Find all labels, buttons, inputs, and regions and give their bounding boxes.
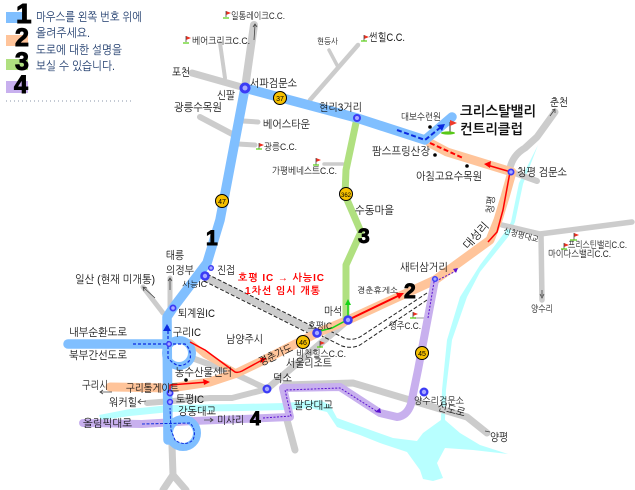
place labels: 청평 검문소 [517,166,568,179]
badge 47 [216,194,228,208]
route 4: purple road [83,280,435,424]
panel: legend [6,0,142,101]
place labels: 마이다스밸리C.C. [548,249,611,260]
destination dots [184,125,469,382]
place labels: 농수산물센터 [175,366,232,379]
badge 45 [416,346,428,360]
badge 45: 45 [418,351,426,358]
legend instructions: 도로에 대한 설명을 [36,43,122,57]
place labels: 워커힐 [109,396,137,409]
place labels: 팜스프링산장 [372,145,431,158]
route 4 dotted arrows [263,268,458,418]
badge 47: 47 [218,199,226,206]
big route numbers: 1 [206,227,218,250]
place labels: 현등사 [317,37,338,46]
badge 362: 362 [341,193,352,199]
place labels: 춘천 [550,96,568,109]
place labels: 새터삼거리 [400,261,448,274]
place labels: 토평IC [176,393,204,406]
big route numbers [206,225,416,430]
route 1: blue road [68,88,452,447]
place labels: 강동대교 [178,405,217,418]
badge 46: 46 [299,340,307,347]
place labels: 베어크리크C.C. [192,36,250,47]
closure notice [238,272,324,297]
place labels: 북부간선도로 [69,349,128,362]
place labels: 내부순환도로 [69,326,128,339]
place labels: 구리톨게이트 [126,382,180,395]
route 3 green arrows [320,299,351,331]
place labels: 신청평대교 [502,226,540,244]
icon: golf course flag [441,120,457,135]
legend instructions: 마우스를 왼쪽 번호 위에 [36,10,142,24]
route 3: green road [345,118,361,320]
place labels: 퇴계원IC [178,307,215,320]
place labels: 아침고요수목원 [416,170,482,183]
legend instructions: 올려주세요. [36,26,90,40]
legend instructions [36,10,142,73]
place labels: 썬힐C.C. [369,31,405,44]
badge 362 [340,188,352,200]
place labels: 포천 [172,66,190,79]
place labels: 광릉C.C. [264,142,297,153]
place labels: 베어스타운 [263,118,311,131]
legend swatch 4: 4 [14,71,28,99]
place labels: 경춘가도 [257,341,295,369]
interchange nodes [166,82,514,405]
badge 37: 37 [276,96,284,103]
place labels: 미사리 [217,414,244,427]
place labels: 서울리조트 [286,357,333,370]
route 1 direction dashes [133,124,445,444]
title: destination name: 컨트리클럽 [460,121,523,137]
legend swatch 3: 3 [15,48,29,76]
route badges [216,92,428,360]
badge 46 [296,336,310,348]
place labels: 일통레이크C.C. [231,11,285,22]
big route numbers: 2 [404,280,416,303]
place labels: 마석 [324,305,342,318]
place labels: 올림픽대로 [83,417,133,430]
closure notice: 1차선 임시 개통 [245,285,321,297]
place labels: 진접 [217,264,235,277]
route 2: orange road [110,143,512,388]
small road arrows [100,24,555,432]
place labels: 호평IC [308,321,332,332]
place labels: 양수리검문소 [414,396,464,407]
place labels: 현리3거리 [319,101,362,114]
water: river and lake [99,145,538,481]
closure notice: 호평 IC → 사능IC [238,272,324,284]
place labels: 양수리 [531,304,553,315]
badge 37 [274,92,286,104]
big route numbers: 3 [358,225,370,248]
title: destination name: 크리스탈밸리 [460,103,536,119]
place labels: 영주C.C. [389,321,421,332]
place labels: 구리시 [82,379,108,392]
big route numbers: 4 [250,409,261,430]
place labels: 덕소 [273,372,293,385]
place labels: 태릉 [166,249,185,262]
place labels: 가평베네스트C.C. [272,166,337,177]
place labels: 의정부 [166,264,195,277]
place labels: 사능IC [182,280,207,289]
place labels: 광릉수목원 [174,101,222,114]
place labels: 일산 (현재 미개통) [75,273,155,286]
golf flags [183,11,579,347]
place labels: 신도로 [436,400,467,420]
legend instructions: 보실 수 있습니다. [36,59,115,73]
place labels [69,11,627,444]
place labels: 양평 [490,431,508,444]
place labels: 청평 [485,195,498,214]
title: destination name [460,103,536,137]
place labels: 대성리 [461,220,492,252]
route 2 red direction lines [170,143,511,391]
place labels: 남양주시 [226,333,263,346]
place labels: 구리IC [173,326,201,339]
place labels: 수동마을 [355,204,395,217]
expressway dashes [204,274,427,347]
place labels: 비천힐스C.C. [296,349,346,360]
place labels: 서파검문소 [250,77,298,90]
place labels: 신팔 [217,89,235,102]
gray roads [143,25,632,490]
place labels: 대보수련원 [401,112,441,123]
legend swatch 2: 2 [15,24,29,52]
place labels: 팔당대교 [294,399,334,412]
place labels: 경춘휴게소 [357,286,399,295]
